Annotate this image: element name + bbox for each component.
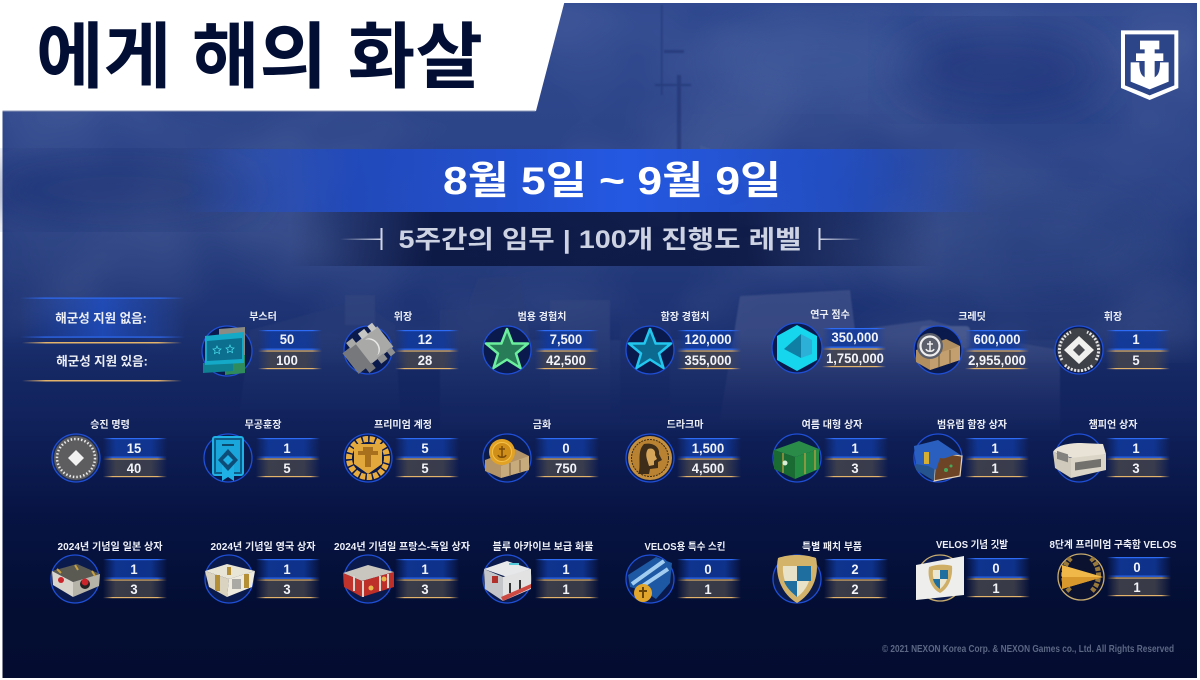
values: 1: [562, 562, 570, 577]
icon: merit medal: [204, 434, 252, 482]
subtitle banner: [290, 212, 940, 266]
reward: research points: [772, 308, 886, 373]
reward: insignia: [1055, 310, 1170, 374]
bars: [677, 330, 741, 369]
reward: VELOS permanent camo: [626, 541, 741, 603]
reward: 2024 Japan crate: [51, 540, 167, 603]
title: 에게 해의 화살: [36, 18, 483, 98]
label: 함장 경험치: [661, 310, 709, 323]
values: 3: [130, 582, 138, 597]
values: [283, 441, 291, 476]
reward: Blue Archive supply cargo: [483, 540, 599, 603]
subtitle text: 5주간의 임무 | 100개 진행도 레벨: [398, 226, 802, 254]
values: [421, 441, 429, 476]
values: [991, 441, 999, 476]
bars: [965, 330, 1029, 369]
bars: [535, 330, 599, 369]
values: 350,000: [831, 330, 879, 345]
icon: green star: [483, 326, 531, 374]
values: 42,500: [546, 353, 586, 368]
label: 특별 패치 부품: [802, 540, 862, 553]
values: 1: [991, 461, 999, 476]
values: [562, 562, 570, 597]
values: 0: [1133, 560, 1141, 575]
reward: VELOS commemorative flag: [916, 538, 1030, 601]
title panel: [0, 0, 565, 112]
reward: camouflage: [339, 310, 459, 379]
icon: promotion gear: [52, 434, 100, 482]
icon: shield patch: [773, 555, 821, 603]
values: 1: [991, 441, 999, 456]
label: 무공훈장: [245, 418, 281, 431]
values: 0: [992, 561, 1000, 576]
icon: credits crate: [914, 326, 962, 374]
values: [555, 441, 577, 476]
values: [851, 441, 859, 476]
values: 3: [1132, 461, 1140, 476]
values: 0: [704, 562, 712, 577]
reward: drachma: [626, 418, 741, 482]
values: 2: [851, 562, 859, 577]
values: 3: [421, 582, 429, 597]
icon: drachma coin: [626, 434, 674, 482]
values: 4,500: [692, 461, 724, 476]
bars: [535, 438, 599, 477]
values: [421, 562, 429, 597]
values: 1: [562, 582, 570, 597]
icon: cyan star: [626, 326, 674, 374]
label: 범유럽 함장 상자: [937, 418, 1007, 431]
values: [276, 332, 298, 368]
reward: ship experience: [626, 310, 741, 374]
values: [851, 562, 859, 597]
values: [127, 441, 142, 476]
label: VELOS 기념 깃발: [936, 538, 1008, 551]
reward: booster: [202, 311, 322, 376]
values: 750: [555, 461, 577, 476]
bars: [395, 438, 459, 477]
icon: gold coin crate: [483, 434, 531, 482]
values: 1: [130, 562, 138, 577]
bars: [535, 559, 599, 598]
bars: [824, 438, 888, 477]
values: [1133, 560, 1141, 595]
bars: [256, 559, 320, 598]
date text: 8월 5일 ~ 9월 9일: [443, 160, 781, 203]
bars: [395, 559, 459, 598]
label: 8단계 프리미엄 구축함 VELOS: [1050, 538, 1177, 551]
icon: Naval Legends logo: [1121, 30, 1178, 100]
values: 355,000: [684, 353, 732, 368]
bars: [677, 438, 741, 477]
bars: [258, 330, 322, 369]
icon: Japan crate: [51, 555, 100, 603]
icon: research hexagon: [772, 323, 822, 373]
icon: silver laurel insignia: [1055, 326, 1103, 374]
values: 5: [421, 441, 429, 456]
values: [684, 332, 732, 368]
bars: [256, 438, 320, 477]
bars: [822, 328, 886, 367]
values: [283, 562, 291, 597]
values: 28: [418, 353, 433, 368]
bars: [965, 438, 1029, 477]
values: [992, 561, 1000, 596]
values: 0: [562, 441, 570, 456]
values: 100: [276, 353, 298, 368]
values: 1: [1133, 580, 1141, 595]
values: [704, 562, 712, 597]
values: 1: [992, 581, 1000, 596]
label: 드라크마: [667, 418, 703, 431]
reward: 2024 France-Germany crate: [334, 540, 470, 603]
icon: gold laurel shield: [344, 434, 392, 482]
values: 5: [283, 461, 291, 476]
bars: [1107, 557, 1171, 596]
legend text: without naval base: 해군성 지원 없음:: [55, 310, 147, 326]
label: 2024년 기념일 프랑스-독일 상자: [334, 540, 470, 553]
bars: [103, 438, 167, 477]
legend text: with naval base: 해군성 지원 있음:: [56, 354, 148, 368]
label: 금화: [533, 418, 551, 431]
values: [692, 441, 724, 476]
icon: commemorative flag: [916, 555, 964, 601]
bars: [1106, 330, 1170, 369]
reward: champion crate: [1053, 418, 1170, 482]
label: 범용 경험치: [518, 310, 566, 323]
label: 승진 명령: [90, 418, 130, 431]
icon: VELOS skin: [626, 555, 674, 603]
bars: [824, 559, 888, 598]
date banner: [180, 149, 990, 212]
label: 크레딧: [958, 310, 986, 323]
values: 1: [704, 582, 712, 597]
icon: VELOS pennant: [1058, 554, 1104, 600]
bars: [395, 330, 459, 369]
icon: France-Germany crate: [343, 555, 394, 603]
values: 1: [1132, 332, 1140, 347]
reward: pan-European ship crate: [914, 418, 1029, 482]
reward: summer big crate: [773, 418, 888, 482]
reward: 2024 UK crate: [205, 540, 320, 603]
icon: green crate: [773, 434, 821, 482]
values: 12: [418, 332, 432, 347]
values: 2,955,000: [968, 353, 1026, 368]
icon: blue covered chest: [914, 434, 962, 482]
icon: Blue Archive crate: [483, 555, 531, 603]
values: [826, 330, 884, 366]
values: [1132, 441, 1140, 476]
values: 1: [283, 562, 291, 577]
reward: free experience: [483, 310, 599, 374]
bars: [103, 559, 167, 598]
reward: merit medal: [204, 418, 320, 482]
values: 3: [283, 582, 291, 597]
label: 휘장: [1104, 310, 1122, 323]
reward: doubloons: [483, 418, 599, 482]
label: 프리미엄 계정: [374, 418, 432, 431]
values: [418, 332, 433, 368]
values: 3: [851, 461, 859, 476]
values: 5: [421, 461, 429, 476]
label: 위장: [394, 310, 412, 323]
values: 120,000: [684, 332, 732, 347]
label: VELOS용 특수 스킨: [644, 541, 726, 553]
values: 7,500: [550, 332, 582, 347]
reward: premium account: [344, 418, 459, 482]
values: 15: [127, 441, 142, 456]
values: 1,750,000: [826, 351, 884, 366]
label: 여름 대형 상자: [802, 418, 862, 431]
reward: tier 8 premium destroyer VELOS: [1050, 538, 1177, 600]
icon: camouflage: [339, 321, 397, 379]
legend: row labels: [20, 298, 185, 382]
reward: special patch part: [773, 540, 888, 603]
values: 1: [851, 441, 859, 456]
label: 2024년 기념일 일본 상자: [58, 540, 162, 553]
label: 연구 점수: [810, 308, 850, 321]
values: 5: [1132, 353, 1140, 368]
icon: UK crate: [205, 555, 255, 603]
bars: [966, 558, 1030, 597]
values: 1: [421, 562, 429, 577]
values: 1,500: [692, 441, 724, 456]
values: 40: [127, 461, 141, 476]
values: [1132, 332, 1140, 368]
values: 600,000: [973, 332, 1021, 347]
reward: promotion order: [52, 418, 167, 482]
values: 50: [280, 332, 294, 347]
bars: [1106, 438, 1170, 477]
label: 블루 아카이브 보급 화물: [492, 540, 594, 553]
reward: credits: [914, 310, 1029, 374]
label: 2024년 기념일 영국 상자: [210, 540, 316, 553]
icon: booster: [202, 326, 252, 376]
label: 부스터: [249, 311, 277, 323]
values: [968, 332, 1026, 368]
values: [546, 332, 586, 368]
icon: white champion chest: [1053, 434, 1106, 482]
values: 1: [1132, 441, 1140, 456]
values: 1: [283, 441, 291, 456]
label: 챔피언 상자: [1089, 418, 1137, 431]
values: [130, 562, 138, 597]
bars: [677, 559, 741, 598]
values: 2: [851, 582, 859, 597]
